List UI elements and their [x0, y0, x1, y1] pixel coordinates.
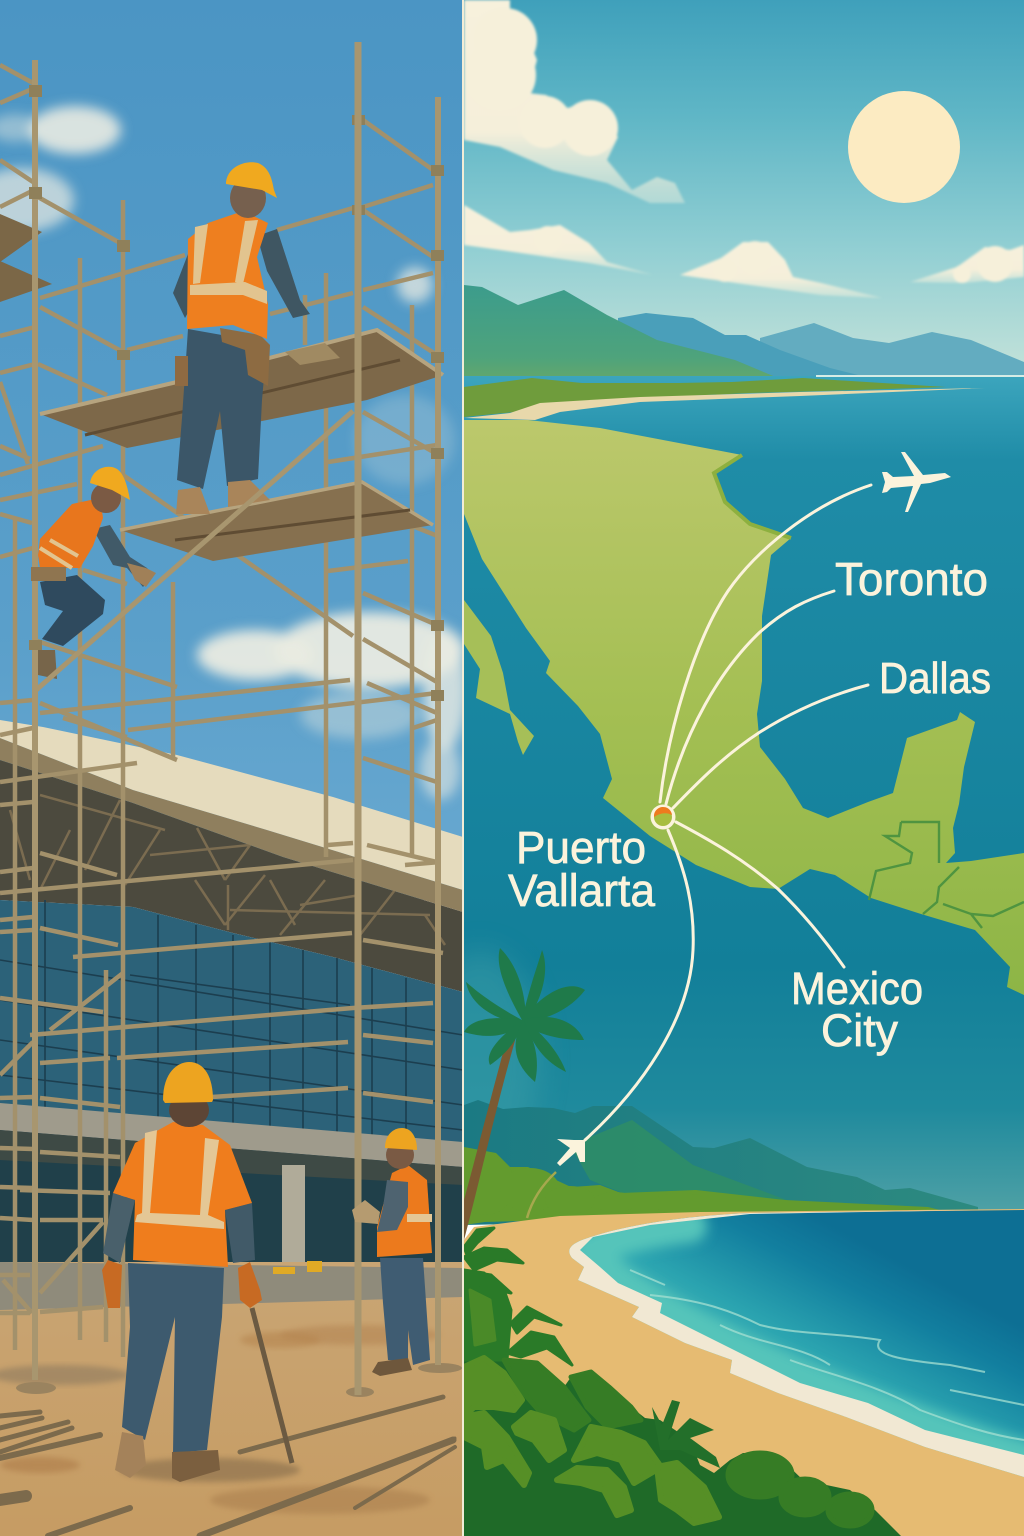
wave lines [630, 1270, 1024, 1440]
lighter water near palm [464, 948, 541, 1109]
green shoreline forest [455, 1147, 940, 1225]
pipes on ground [0, 1397, 455, 1536]
jungle foreground [464, 1228, 901, 1536]
panel: construction scene [0, 0, 467, 1536]
palm tree tall [464, 948, 585, 1240]
clouds right [464, 0, 1024, 298]
shallows along shore [592, 1226, 1024, 1458]
bay water [569, 1210, 1024, 1477]
label: Mexico City: Mexico [791, 963, 923, 1014]
label: Puerto Vallarta: Puerto [516, 822, 646, 873]
sky right [464, 0, 1024, 385]
left edge platforms [0, 214, 52, 302]
mid green foliage [504, 1360, 872, 1526]
surf foam [569, 1210, 1024, 1477]
scaffold back frame [0, 65, 443, 1357]
upper platform [40, 330, 443, 448]
lower platform [120, 482, 433, 561]
route lines [585, 485, 871, 1140]
label: Puerto Vallarta [508, 832, 656, 907]
scaffold couplers [29, 85, 444, 701]
label: Toronto: Toronto [835, 553, 988, 605]
far shore [464, 378, 985, 420]
light foliage clumps [464, 1358, 719, 1523]
front pole and diagonal [35, 42, 358, 1395]
building [0, 720, 463, 1272]
beach sand [464, 1209, 1024, 1536]
worker on upper platform [173, 162, 310, 514]
icon: plane top [882, 452, 951, 512]
pole feet [16, 1363, 462, 1397]
label: Dallas: Dallas [879, 654, 991, 703]
label: Puerto Vallarta: Vallarta [508, 865, 656, 916]
back mountains beach [464, 1100, 978, 1225]
icon: plane bottom [557, 1139, 585, 1166]
label: Mexico City: City [821, 1005, 898, 1056]
yellow materials [273, 1261, 322, 1274]
scaffold left pole and right pole [35, 60, 438, 1380]
small thin palm [527, 1172, 556, 1218]
map: Mexico and Central America [464, 420, 1024, 995]
map: Baja peninsula [464, 600, 534, 755]
worker foreground left [102, 1062, 292, 1482]
label: Mexico City [794, 970, 922, 1056]
sky left [0, 0, 464, 900]
worker climbing [31, 467, 156, 679]
small palm on beach [652, 1400, 720, 1468]
near mountains [464, 285, 773, 376]
sun [848, 91, 960, 203]
ground [0, 1262, 464, 1536]
ocean [464, 376, 1024, 1218]
clouds left [0, 106, 467, 800]
panel: destination scene [420, 0, 1024, 1536]
foothill shading [574, 1120, 786, 1200]
worker foreground right [352, 1128, 432, 1376]
divider [462, 0, 464, 1536]
horizon glow [816, 375, 1024, 377]
palm fronds left [464, 1228, 572, 1365]
far mountains [618, 313, 1024, 380]
marker: Puerto Vallarta [650, 804, 676, 830]
